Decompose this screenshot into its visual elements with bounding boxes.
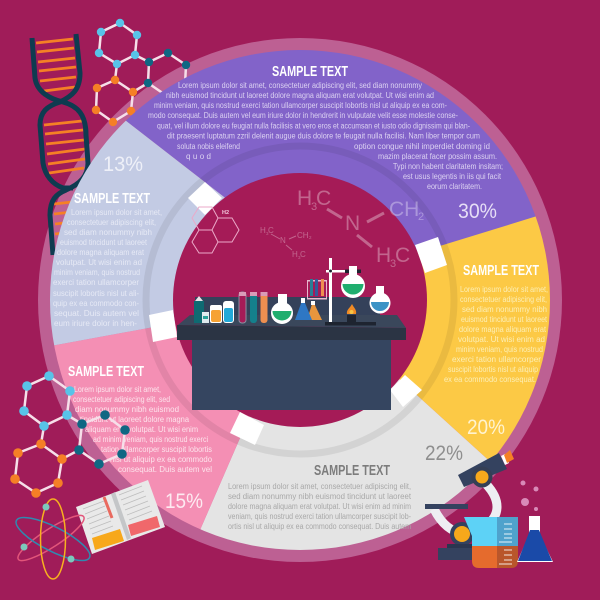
text block: pink: Lorem ipsum dolor sit amet, bbox=[74, 385, 161, 394]
large chemical formula: 3 bbox=[390, 258, 396, 270]
icon: lower molecule bbox=[10, 371, 130, 498]
text block: lavender: suscipit lobortis nisl ut ali- bbox=[53, 289, 139, 298]
segment: yellow bbox=[400, 216, 550, 459]
text block: grey: Lorem ipsum dolor sit amet, consectetuer adipiscing elit, bbox=[228, 482, 411, 491]
heading: SAMPLE TEXT bbox=[68, 363, 144, 380]
heading: SAMPLE TEXT bbox=[463, 262, 539, 279]
small chemical formula: CH bbox=[297, 231, 309, 240]
text block: purple bbox=[148, 63, 503, 191]
large chemical formula: H bbox=[297, 187, 312, 210]
text block: lavender: consectetuer adipiscing elit, bbox=[67, 218, 156, 227]
text block: purple: quat, vel illum dolore eu feugiat nulla facilisis at vero eros et accumsan et iusto odio dignissim qui blan- bbox=[157, 122, 470, 130]
large chemical formula: CH bbox=[389, 198, 419, 221]
text block: yellow: suscipit lobortis nisl ut aliquip bbox=[448, 365, 538, 374]
text block: yellow bbox=[444, 262, 548, 384]
text block: grey bbox=[228, 462, 412, 531]
text block: lavender: dolore magna aliquam erat bbox=[57, 248, 145, 257]
small chemical formula: C bbox=[268, 226, 274, 235]
text block: purple: minim veniam, quis nostrud exerci tation ullamcorper suscipit lobortis nisl ut aliquip ex ea com- bbox=[154, 101, 447, 110]
text block: pink: aliquam erat volutpat. Ut wisi enim bbox=[85, 425, 198, 434]
text block: purple: eorum claritatem. bbox=[427, 182, 482, 191]
percent: 20%: 20% bbox=[467, 416, 505, 439]
icon: hexagon H2 molecule: H2 bbox=[222, 210, 229, 216]
text block: lavender: volutpat. Ut wisi enim ad bbox=[56, 258, 142, 267]
small chemical formula bbox=[260, 226, 312, 260]
text block: purple: Lorem ipsum dolor sit amet, consectetuer adipiscing elit, sed diam nonummy bbox=[178, 81, 422, 90]
text block: yellow: euismod tincidunt ut laoreet bbox=[461, 315, 548, 324]
text block: pink: ad minim veniam, quis nostrud exerci bbox=[93, 435, 208, 444]
text block: purple: q u o d bbox=[186, 152, 211, 161]
segment: pink bbox=[54, 323, 250, 530]
centre circle bbox=[173, 173, 427, 427]
text block: pink bbox=[68, 363, 213, 474]
text block: lavender bbox=[53, 190, 162, 328]
text block: yellow: Lorem ipsum dolor sit amet, bbox=[460, 285, 548, 294]
white connector tabs bbox=[149, 182, 447, 445]
text block: grey: dolore magna aliquam erat volutpat. Ut wisi enim ad minim bbox=[228, 502, 411, 511]
icon: beaker bbox=[464, 517, 518, 568]
segment: grey bbox=[200, 379, 488, 550]
large chemical formula: H bbox=[376, 244, 391, 267]
text block: grey: veniam, quis nostrud exerci tation ullamcorper suscipit lob- bbox=[228, 512, 411, 521]
text block: grey: sed diam nonummy nibh euismod tincidunt ut laoreet bbox=[228, 492, 412, 501]
large chemical formula: C bbox=[395, 244, 410, 267]
text block: purple: est usus legentis in iis qui facit bbox=[403, 172, 502, 181]
small chemical formula: C bbox=[300, 250, 306, 259]
percent: 13%: 13% bbox=[103, 153, 143, 176]
text block: lavender: quip ex ea commodo con- bbox=[53, 299, 139, 308]
text block: yellow: exerci tation ullamcorper bbox=[452, 355, 541, 364]
text block: pink: diam nonummy nibh euismod bbox=[75, 405, 179, 414]
text block: purple: Typi non habent claritatem insitam; bbox=[393, 162, 503, 171]
back bench bbox=[195, 297, 380, 317]
table top bbox=[178, 315, 406, 328]
stand flask bbox=[341, 266, 365, 298]
round flask: green bbox=[271, 294, 293, 324]
stand bbox=[325, 258, 376, 326]
text block: yellow: dolore magna aliquam erat bbox=[459, 325, 547, 334]
text block: purple: dit praesent luptatum zzril delenit augue duis dolore te feugait nulla facilisi. Nam liber tempor cum bbox=[167, 132, 480, 140]
percent: 22%: 22% bbox=[425, 442, 463, 465]
text block: purple: option congue nihil imperdiet doming id bbox=[354, 142, 490, 151]
heading: SAMPLE TEXT bbox=[314, 462, 390, 479]
icon: atom bbox=[11, 499, 95, 579]
small chemical formula: 2 bbox=[309, 235, 312, 240]
text block: purple: soluta nobis eleifend bbox=[177, 142, 240, 151]
icon: conical flask with bubbles bbox=[517, 480, 553, 562]
text block: pink: tation ullamcorper suscipit lobortis bbox=[101, 445, 212, 454]
outer ring bbox=[38, 38, 562, 562]
small chemical formula: H bbox=[260, 226, 266, 235]
icon: open book bbox=[76, 480, 165, 554]
small chemical formula: H bbox=[292, 250, 298, 259]
text block: pink: consequat. Duis autem vel bbox=[118, 465, 212, 474]
test tubes bbox=[239, 292, 268, 323]
large chemical formula bbox=[297, 187, 424, 270]
text block: yellow: sed diam nonummy nibh bbox=[462, 305, 547, 314]
large chemical formula: C bbox=[316, 187, 331, 210]
text block: lavender: euismod tincidunt ut laoreet bbox=[60, 238, 148, 247]
icon: microscope bbox=[425, 450, 514, 560]
jar: orange bbox=[210, 305, 222, 323]
small chemical formula: 3 bbox=[266, 231, 269, 236]
text block: lavender: eum iriure dolor in hen- bbox=[54, 319, 137, 328]
icon: top molecule bbox=[92, 19, 190, 126]
tube rack bbox=[307, 279, 327, 300]
heading: SAMPLE TEXT bbox=[272, 63, 348, 80]
text block: yellow: volutpat. Ut wisi enim ad bbox=[458, 335, 545, 344]
segment: purple bbox=[126, 50, 536, 252]
large chemical formula: 3 bbox=[311, 201, 317, 213]
large chemical formula: N bbox=[345, 212, 360, 235]
conical flasks bbox=[295, 298, 322, 320]
small chemical formula: N bbox=[280, 236, 286, 245]
text block: purple: modo consequat. Duis autem vel eum iriure dolor in hendrerit in vulputate velit esse molestie conse- bbox=[148, 111, 458, 120]
table body bbox=[192, 340, 391, 410]
text block: yellow: ex ea commodo consequat. bbox=[444, 375, 536, 384]
icon: DNA helix bbox=[32, 34, 90, 255]
pie chart bbox=[40, 40, 560, 560]
text block: lavender: Lorem ipsum dolor sit amet, bbox=[71, 208, 162, 217]
heading: SAMPLE TEXT bbox=[74, 190, 150, 207]
text block: grey: ortis nisl ut aliquip ex ea commodo consequat. Duis autem bbox=[228, 522, 411, 531]
text block: yellow: consectetuer adipiscing elit, bbox=[460, 295, 547, 304]
percent: 30%: 30% bbox=[458, 200, 497, 223]
lab equipment bbox=[194, 258, 390, 326]
icon: hexagon H2 molecule bbox=[192, 207, 239, 253]
text block: yellow: minim veniam, quis nostrud bbox=[456, 345, 543, 354]
text block: pink: tincidunt ut laoreet dolore magna bbox=[80, 415, 190, 424]
text block: pink: consectetuer adipiscing elit, sed bbox=[73, 395, 170, 404]
round flask: blue bbox=[370, 286, 390, 314]
burner bbox=[347, 304, 356, 322]
percent: 15%: 15% bbox=[165, 490, 203, 513]
text block: purple: nibh euismod tincidunt ut laoreet dolore magna aliquam erat volutpat. Ut wisi enim ad bbox=[166, 91, 434, 100]
text block: lavender: sed diam nonummy nibh bbox=[64, 228, 152, 237]
text block: lavender: minim veniam, quis nostrud bbox=[54, 268, 140, 277]
lab table bbox=[177, 297, 406, 410]
segment: lavender bbox=[50, 120, 225, 346]
jar: blue bbox=[223, 301, 234, 323]
text block: lavender: sequat. Duis autem vel bbox=[54, 309, 139, 318]
text block: lavender: exerci tation ullamcorper bbox=[53, 278, 139, 287]
bottles bbox=[194, 296, 209, 323]
inner shaded ring bbox=[146, 146, 454, 454]
large chemical formula: 2 bbox=[418, 211, 424, 223]
small chemical formula: 3 bbox=[298, 255, 301, 260]
text block: pink: nisl ut aliquip ex ea commodo bbox=[110, 455, 213, 464]
text block: purple: mazim placerat facer possim assum. bbox=[378, 152, 497, 161]
